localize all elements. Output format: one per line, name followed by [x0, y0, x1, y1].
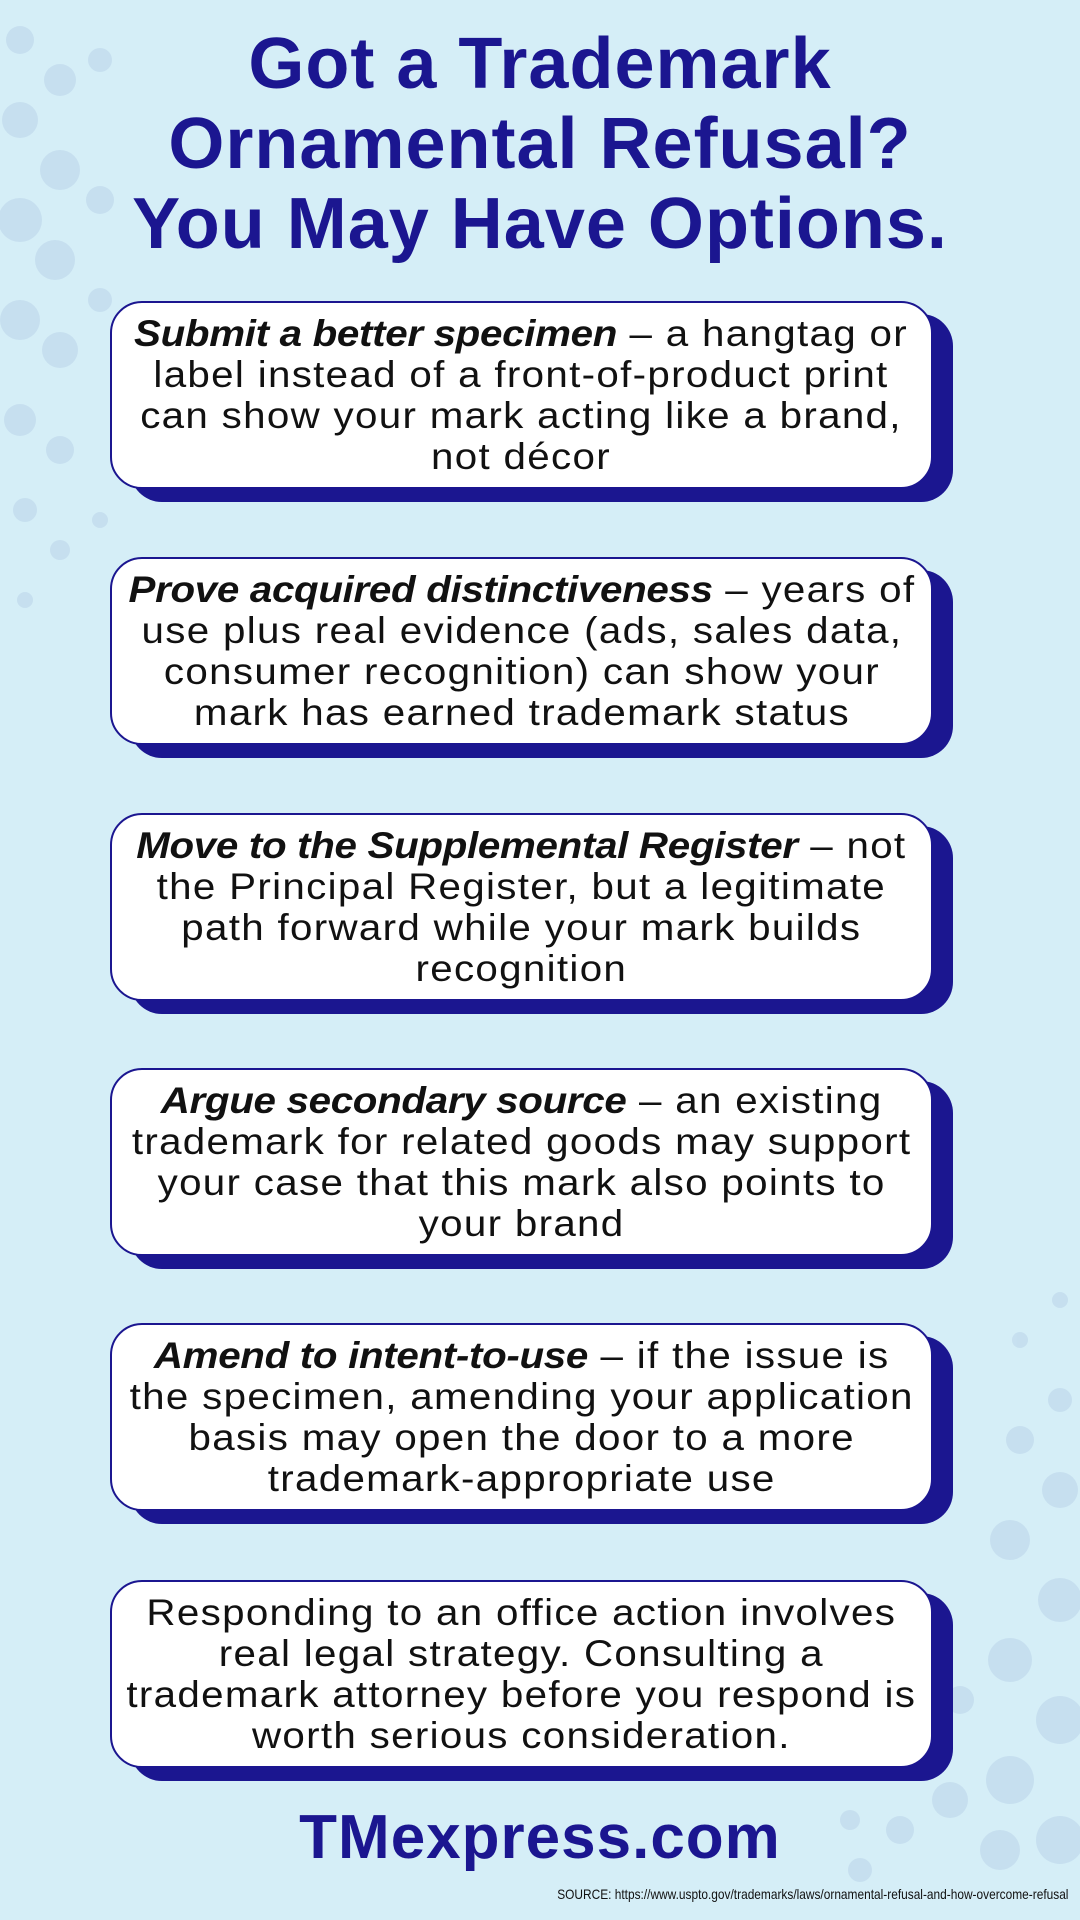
brand footer: TMexpress.com [299, 1803, 781, 1872]
card: better specimen: can show your mark acting like a brand, [141, 395, 902, 436]
card: intent-to-use [110, 1323, 933, 1511]
card: secondary source: your case that this mark also points to [158, 1162, 885, 1203]
card: acquired distinctiveness [110, 557, 933, 745]
source note: SOURCE: https://www.uspto.gov/trademarks/laws/ornamental-refusal-and-how-overcome-refusal [557, 1886, 1068, 1902]
card: acquired distinctiveness: mark has earned trademark status [193, 692, 850, 733]
card: better specimen: not décor [432, 436, 611, 477]
card: consult attorney: real legal strategy. Consulting a [219, 1633, 824, 1674]
card: intent-to-use: basis may open the door to a more [188, 1417, 855, 1458]
card: better specimen: label instead of a front-of-product print [154, 354, 889, 395]
card: secondary source: trademark for related goods may support [132, 1121, 911, 1162]
card: better specimen [110, 301, 933, 489]
card: intent-to-use: the specimen, amending your application [129, 1376, 914, 1417]
title: You May Have Options. [132, 184, 948, 264]
card: supplemental register: the Principal Register, but a legitimate [157, 866, 886, 907]
card: supplemental register [110, 813, 933, 1001]
card: acquired distinctiveness: use plus real evidence (ads, sales data, [141, 610, 902, 651]
card: consult attorney [110, 1580, 933, 1768]
card: supplemental register: path forward while your mark builds [181, 907, 862, 948]
card: intent-to-use: trademark-appropriate use [268, 1458, 775, 1499]
card: consult attorney: Responding to an office action involves [147, 1592, 896, 1633]
card: supplemental register: recognition [416, 948, 627, 989]
card: better specimen: Submit a better specimen – a hangtag or [135, 313, 908, 354]
card: acquired distinctiveness: Prove acquired distinctiveness – years of [128, 569, 915, 610]
card: secondary source [110, 1068, 933, 1256]
card: secondary source: your brand [419, 1203, 624, 1244]
title: Ornamental Refusal? [168, 104, 912, 184]
title: Got a Trademark [248, 24, 832, 104]
card: consult attorney: trademark attorney before you respond is [127, 1674, 916, 1715]
card: secondary source: Argue secondary source – an existing [161, 1080, 882, 1121]
card: intent-to-use: Amend to intent-to-use – if the issue is [154, 1335, 889, 1376]
card: acquired distinctiveness: consumer recognition) can show your [163, 651, 880, 692]
title [132, 24, 948, 264]
card: supplemental register: Move to the Supplemental Register – not [136, 825, 907, 866]
card: consult attorney: worth serious consideration. [252, 1715, 791, 1756]
